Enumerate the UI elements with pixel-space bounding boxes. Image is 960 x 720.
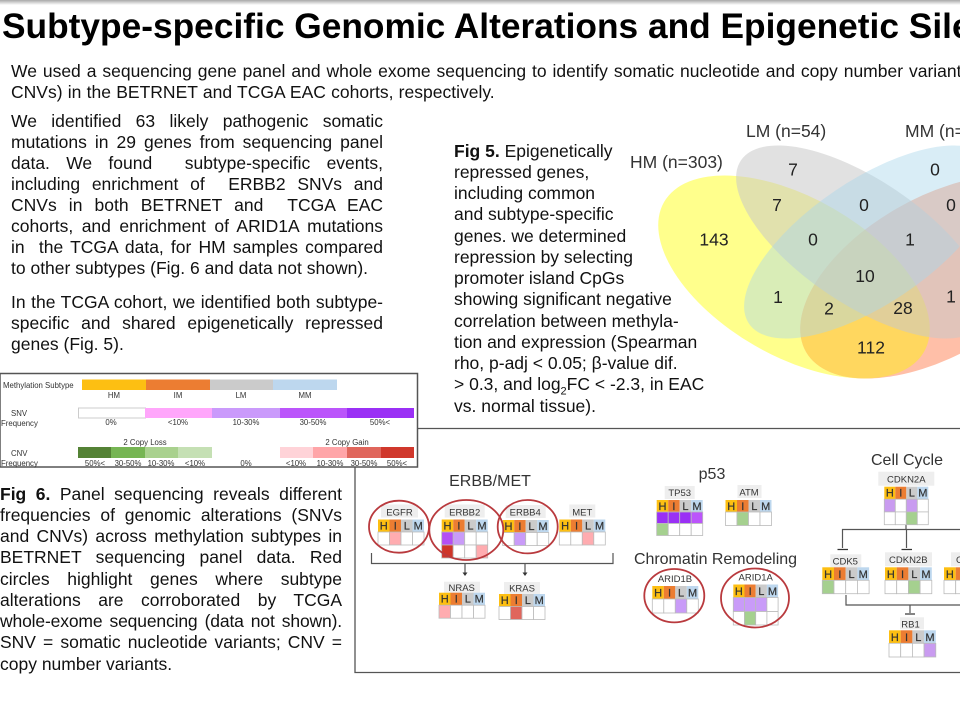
venn counts: 1 bbox=[773, 287, 783, 307]
text block: epigenetic repression findings: genes (Fig. 5). bbox=[11, 334, 124, 354]
gene: MET: H bbox=[561, 520, 569, 532]
caption: figure 6: whole-exome sequencing (data not shown). bbox=[0, 611, 342, 631]
gene: NRAS: L bbox=[465, 594, 471, 606]
legend: methylation subtype: Methylation Subtype bbox=[3, 381, 74, 390]
gene: RB1: H bbox=[891, 632, 899, 644]
intro text bbox=[11, 61, 960, 102]
caption: figure 5: repression by selecting bbox=[454, 247, 633, 267]
venn counts: 143 bbox=[699, 230, 729, 250]
gene: NRAS bbox=[439, 582, 485, 618]
legend: SNV frequency: <10% bbox=[168, 418, 188, 427]
venn counts: 1 bbox=[905, 230, 915, 250]
gene: EGFR bbox=[378, 504, 424, 545]
legend: CNV frequency: 50%< bbox=[387, 459, 408, 468]
legend: SNV frequency: 50%< bbox=[370, 418, 391, 427]
gene: ARID1A bbox=[733, 572, 778, 625]
caption: figure 5: genes. we determined bbox=[454, 226, 626, 246]
text block: epigenetic repression findings bbox=[11, 292, 383, 354]
gene: CDK5: H bbox=[824, 569, 832, 581]
gene: CDKN2B: CDKN2B bbox=[889, 555, 928, 566]
gene: ATM: M bbox=[761, 501, 770, 513]
text block: epigenetic repression findings: specific and shared epigenetically repressed bbox=[11, 313, 383, 333]
gene: ATM bbox=[726, 485, 772, 526]
caption: figure 5: tion and expression (Spearman bbox=[454, 332, 697, 352]
legend: CNV frequency: 10-30% bbox=[148, 459, 175, 468]
gene: MET bbox=[559, 504, 605, 545]
gene: ARID1B: ARID1B bbox=[658, 574, 692, 585]
gene: ARID1A: H bbox=[735, 586, 743, 598]
gene: TP53 bbox=[657, 486, 703, 536]
gene: CDKN2B: H bbox=[887, 569, 895, 581]
caption: figure 6: and CNVs) across methylation subtypes in bbox=[0, 526, 342, 546]
gene: EGFR: EGFR bbox=[386, 508, 413, 518]
gene: ARID1A: I bbox=[749, 586, 752, 598]
legend: CNV frequency: CNV bbox=[11, 449, 28, 458]
caption: figure 5: promoter island CpGs bbox=[454, 268, 624, 288]
caption: figure 5: > 0.3, and log2FC < -2.3, in EAC bbox=[454, 374, 704, 398]
caption: figure 6: BETRNET sequencing panel data. Red bbox=[0, 547, 342, 567]
legend: CNV frequency: 10-30% bbox=[317, 459, 344, 468]
gene: CDKN2B: L bbox=[911, 569, 917, 581]
gene: CDKN2B: I bbox=[901, 569, 904, 581]
gene: CDKN2A bbox=[878, 472, 934, 525]
venn counts: 0 bbox=[808, 230, 818, 250]
gene: ARID1B: I bbox=[668, 588, 671, 600]
gene: ERBB2: ERBB2 bbox=[449, 508, 480, 518]
gene: KRAS: L bbox=[525, 595, 531, 607]
caption: figure 5: rho, p-adj < 0.05; β-value dif. bbox=[454, 353, 678, 373]
text block: somatic mutation findings: mutations in 29 genes from sequencing panel bbox=[11, 132, 383, 152]
gene: ARID1B: H bbox=[654, 588, 662, 600]
gene: CDKN2A: I bbox=[899, 488, 902, 500]
venn counts: 10 bbox=[855, 266, 875, 286]
caption: figure 5: correlation between methyla- bbox=[454, 311, 679, 331]
legend: CNV frequency: <10% bbox=[185, 459, 205, 468]
gene: EGFR: L bbox=[404, 520, 410, 532]
gene: KRAS bbox=[499, 582, 545, 620]
gene: ERBB4 bbox=[503, 505, 549, 546]
legend: CNV frequency: Frequency bbox=[1, 459, 38, 468]
legend: CNV frequency: 2 Copy Gain bbox=[325, 438, 369, 447]
legend: CNV frequency bbox=[1, 438, 414, 468]
gene: NRAS: H bbox=[441, 594, 449, 606]
gene: ARID1B bbox=[652, 574, 698, 613]
caption: figure 5: vs. normal tissue). bbox=[454, 396, 596, 416]
panel: gene alteration pathways bbox=[355, 428, 960, 672]
gene: NRAS: NRAS bbox=[448, 583, 475, 594]
red circles: highlighted genes bbox=[369, 500, 789, 628]
gene: ARID1A: L bbox=[758, 586, 764, 598]
venn counts: 7 bbox=[788, 160, 798, 180]
connector: ERBB bracket with arrows bbox=[372, 553, 613, 576]
venn counts: 0 bbox=[930, 160, 940, 180]
text block: somatic mutation findings: to other subtypes (Fig. 6 and data not shown). bbox=[11, 258, 368, 278]
caption: figure 6: frequencies of genomic alterations (SNVs bbox=[0, 505, 342, 525]
venn counts: 112 bbox=[857, 338, 885, 358]
gene: EGFR: H bbox=[380, 520, 388, 532]
gene: TP53: L bbox=[682, 501, 689, 513]
gene: NRAS: I bbox=[455, 594, 458, 606]
legend: SNV frequency bbox=[1, 408, 414, 428]
gene: CDK5: I bbox=[838, 569, 841, 581]
gene: CDKN2B bbox=[885, 552, 932, 594]
heading: ERBB/MET: ERBB/MET bbox=[449, 473, 531, 490]
connector: Cell cycle inhibition lines bbox=[838, 525, 960, 614]
heading: Cell Cycle: Cell Cycle bbox=[871, 452, 943, 469]
legend: methylation subtype: HM bbox=[108, 391, 120, 400]
gene: ARID1A: M bbox=[768, 586, 777, 598]
gene: MET: MET bbox=[572, 508, 593, 518]
caption: figure 5: and subtype-specific bbox=[454, 204, 614, 224]
legend: CNV frequency: 2 Copy Loss bbox=[123, 438, 167, 447]
venn set labels: HM (n=303) bbox=[630, 152, 723, 172]
caption: figure 5: repressed genes, bbox=[454, 162, 589, 182]
gene: ERBB4: H bbox=[504, 521, 512, 533]
gene: CDKN2B: M bbox=[921, 569, 931, 581]
venn set labels bbox=[630, 121, 960, 172]
text block: somatic mutation findings: We identified 63 likely pathogenic somatic bbox=[11, 111, 383, 131]
gene: CDK5 bbox=[822, 554, 869, 594]
caption: figure 6: copy number variants. bbox=[0, 654, 172, 674]
venn diagram bbox=[631, 124, 960, 378]
gene: CDKN2A: M bbox=[918, 488, 927, 500]
gene: ERBB2 bbox=[442, 504, 488, 558]
gene: ARID1B: M bbox=[688, 588, 697, 600]
venn set labels: LM (n=54) bbox=[746, 121, 826, 141]
gene: CDK4: H bbox=[946, 569, 954, 581]
venn set: LM bbox=[706, 109, 960, 375]
venn counts: 2 bbox=[824, 298, 834, 318]
text block: somatic mutation findings: including enrichment of ERBB2 SNVs and bbox=[11, 174, 383, 194]
text block: somatic mutation findings: data. We found subtype-specific events, bbox=[11, 153, 383, 173]
legend: CNV frequency: 50%< bbox=[85, 459, 106, 468]
gene: ERBB2: I bbox=[457, 520, 460, 532]
legend bbox=[0, 374, 418, 468]
text block: somatic mutation findings bbox=[11, 111, 383, 278]
gene: MET: I bbox=[575, 520, 578, 532]
caption: figure 5: including common bbox=[454, 183, 595, 203]
caption: figure 6: Fig 6. Panel sequencing reveals different bbox=[0, 484, 342, 504]
legend: SNV frequency: Frequency bbox=[1, 419, 38, 428]
text block: somatic mutation findings: in the TCGA data, for HM samples compared bbox=[11, 237, 383, 257]
venn counts: 28 bbox=[893, 298, 913, 318]
gene: RB1: I bbox=[905, 632, 908, 644]
gene: KRAS: H bbox=[501, 595, 509, 607]
legend: methylation subtype: MM bbox=[298, 391, 312, 400]
gene: ATM: ATM bbox=[739, 488, 759, 498]
caption: figure 6 bbox=[0, 484, 342, 674]
venn set: MM bbox=[714, 109, 960, 375]
gene: ERBB4: ERBB4 bbox=[510, 508, 541, 518]
gene: ARID1A: ARID1A bbox=[739, 572, 774, 584]
gene: NRAS: M bbox=[475, 594, 484, 606]
gene: ATM: H bbox=[727, 501, 735, 513]
caption: figure 5 bbox=[454, 141, 704, 416]
gene: RB1: RB1 bbox=[901, 619, 920, 630]
caption: figure 6: circles highlight genes where subtype bbox=[0, 569, 342, 589]
legend: CNV frequency: 30-50% bbox=[115, 459, 142, 468]
gene: ERBB4: M bbox=[538, 521, 548, 533]
gene: MET: L bbox=[585, 520, 591, 532]
gene: ERBB2: M bbox=[477, 520, 487, 532]
legend: methylation subtype: IM bbox=[174, 391, 182, 400]
caption: figure 6: alterations are corroborated by TCGA bbox=[0, 590, 342, 610]
gene: CDK4 bbox=[944, 552, 960, 594]
heading: p53: p53 bbox=[699, 466, 725, 483]
gene: EGFR: M bbox=[414, 520, 423, 532]
venn counts: 0 bbox=[859, 195, 869, 215]
text block: somatic mutation findings: CNVs in both BETRNET and TCGA EAC bbox=[11, 195, 383, 215]
legend: SNV frequency: 10-30% bbox=[233, 418, 260, 427]
intro text: CNVs) in the BETRNET and TCGA EAC cohorts, respectively. bbox=[11, 82, 495, 102]
gene: ARID1B: L bbox=[678, 588, 684, 600]
legend: methylation subtype bbox=[3, 380, 337, 400]
gene: KRAS: M bbox=[535, 595, 544, 607]
gene: CDK5: L bbox=[848, 569, 855, 581]
legend: CNV frequency: <10% bbox=[286, 459, 306, 468]
caption: figure 5: Fig 5. Epigenetically bbox=[454, 141, 613, 161]
legend: SNV frequency: 0% bbox=[105, 418, 117, 427]
gene: TP53: TP53 bbox=[668, 488, 691, 499]
gene: RB1: M bbox=[925, 632, 935, 644]
legend: methylation subtype: LM bbox=[236, 391, 246, 400]
gene: CDKN2A: H bbox=[886, 488, 894, 500]
venn counts: 0 bbox=[946, 195, 956, 215]
gene: ERBB4: L bbox=[528, 521, 535, 533]
venn counts: 1 bbox=[946, 286, 956, 306]
gene: TP53: I bbox=[672, 501, 675, 513]
intro text: We used a sequencing gene panel and whole exome sequencing to identify somatic nucleotide and copy number variants bbox=[11, 61, 960, 81]
venn counts bbox=[699, 160, 956, 358]
gene: MET: M bbox=[595, 520, 604, 532]
gene: CDK5: CDK5 bbox=[833, 556, 858, 567]
gene: RB1 bbox=[889, 617, 936, 657]
gene: CDKN2A: CDKN2A bbox=[887, 475, 926, 486]
venn set: IM bbox=[767, 134, 960, 420]
legend: SNV frequency: 30-50% bbox=[300, 418, 327, 427]
heading: Chromatin Remodeling: Chromatin Remodeling bbox=[634, 551, 797, 568]
caption: figure 6: SNV = somatic nucleotide variants; CNV = bbox=[0, 632, 342, 652]
venn overlap: HM and IM bbox=[800, 230, 930, 378]
legend: SNV frequency: SNV bbox=[11, 409, 28, 418]
text block: epigenetic repression findings: In the TCGA cohort, we identified both subtype- bbox=[11, 292, 383, 312]
gene: TP53: M bbox=[692, 501, 702, 513]
gene: ATM: L bbox=[751, 501, 757, 513]
legend: CNV frequency: 30-50% bbox=[351, 459, 378, 468]
legend: CNV frequency: 0% bbox=[240, 459, 252, 468]
gene: ERBB2: H bbox=[443, 520, 451, 532]
gene: ERBB2: L bbox=[467, 520, 474, 532]
gene: ATM: I bbox=[741, 501, 744, 513]
gene: RB1: L bbox=[915, 632, 921, 644]
gene: ERBB4: I bbox=[518, 521, 521, 533]
gene: CDK5: M bbox=[859, 569, 868, 581]
gene: EGFR: I bbox=[394, 520, 397, 532]
text block: somatic mutation findings: cohorts, and enrichment of ARID1A mutations bbox=[11, 216, 383, 236]
venn set: HM bbox=[625, 134, 960, 420]
venn counts: 7 bbox=[772, 195, 782, 215]
gene: CDKN2A: L bbox=[909, 488, 915, 500]
gene: KRAS: I bbox=[515, 595, 518, 607]
gene: TP53: H bbox=[658, 501, 666, 513]
caption: figure 5: showing significant negative bbox=[454, 289, 672, 309]
gene: KRAS: KRAS bbox=[509, 584, 535, 594]
